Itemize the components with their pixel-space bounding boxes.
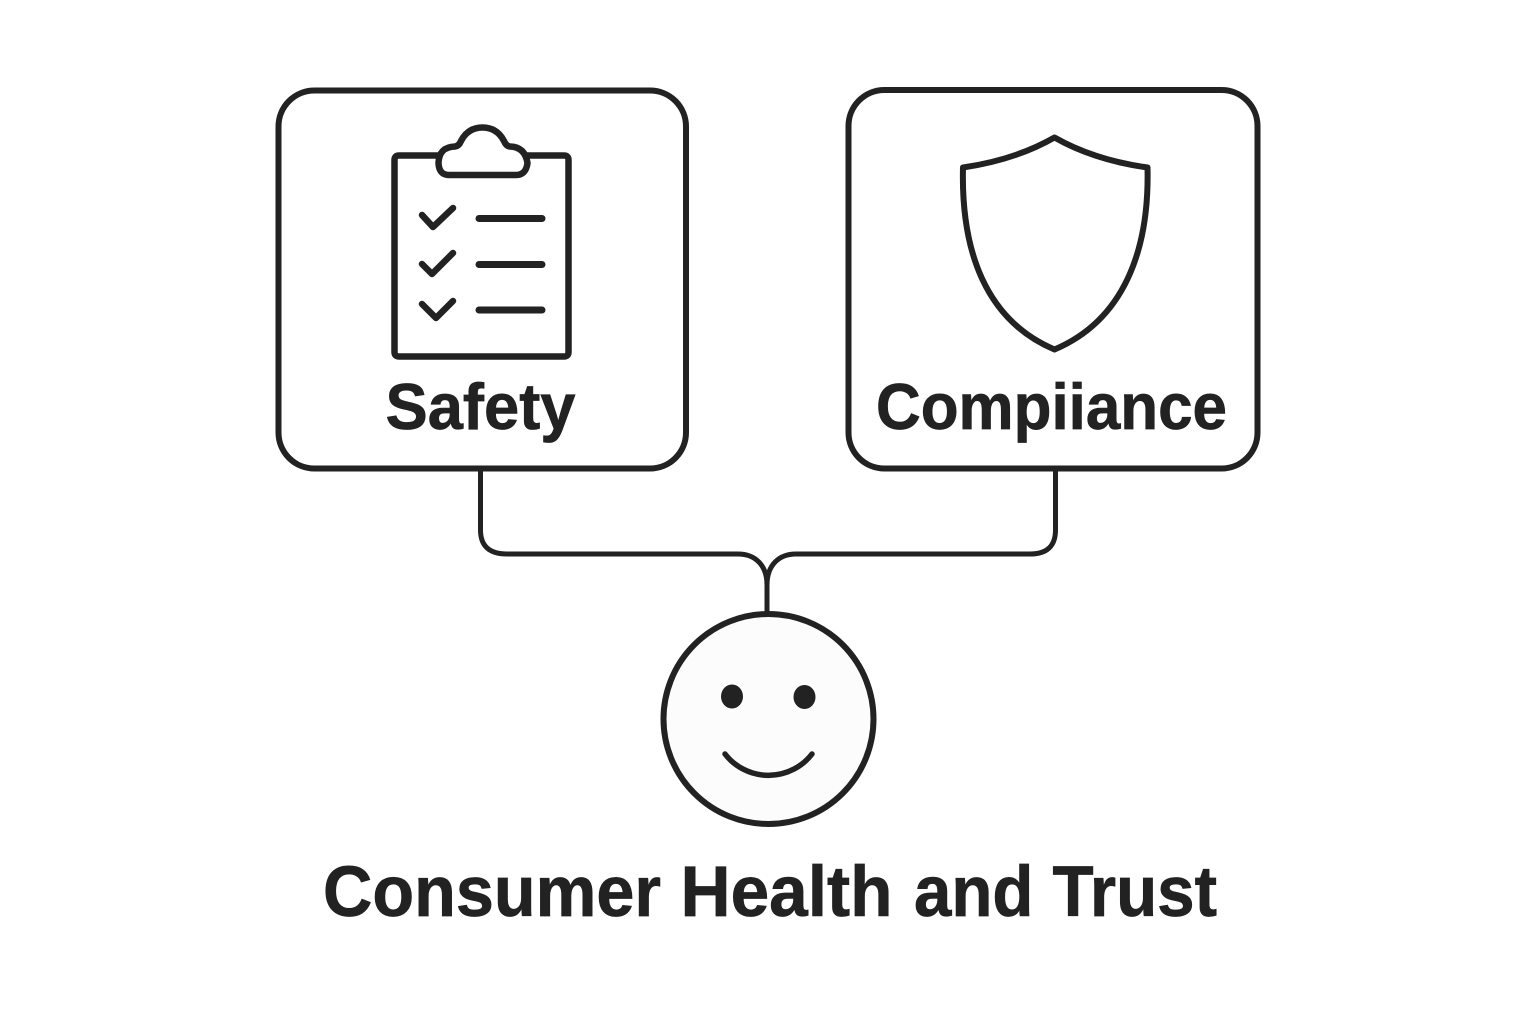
- icon: clipboard checklist: [394, 128, 568, 356]
- icon: smiley face: [664, 614, 874, 824]
- icon: shield: [963, 138, 1148, 350]
- title: and: [914, 853, 1034, 932]
- label: compliance: Compiiance: [876, 370, 1227, 443]
- panel: compliance: [848, 90, 1258, 468]
- connector lines: [480, 470, 1056, 614]
- title: Trust: [1052, 853, 1217, 932]
- title: Health: [680, 853, 892, 932]
- title: Consumer: [323, 853, 661, 932]
- title: [323, 853, 1217, 932]
- label: safety: Safety: [386, 370, 576, 443]
- panel: safety: [278, 90, 686, 468]
